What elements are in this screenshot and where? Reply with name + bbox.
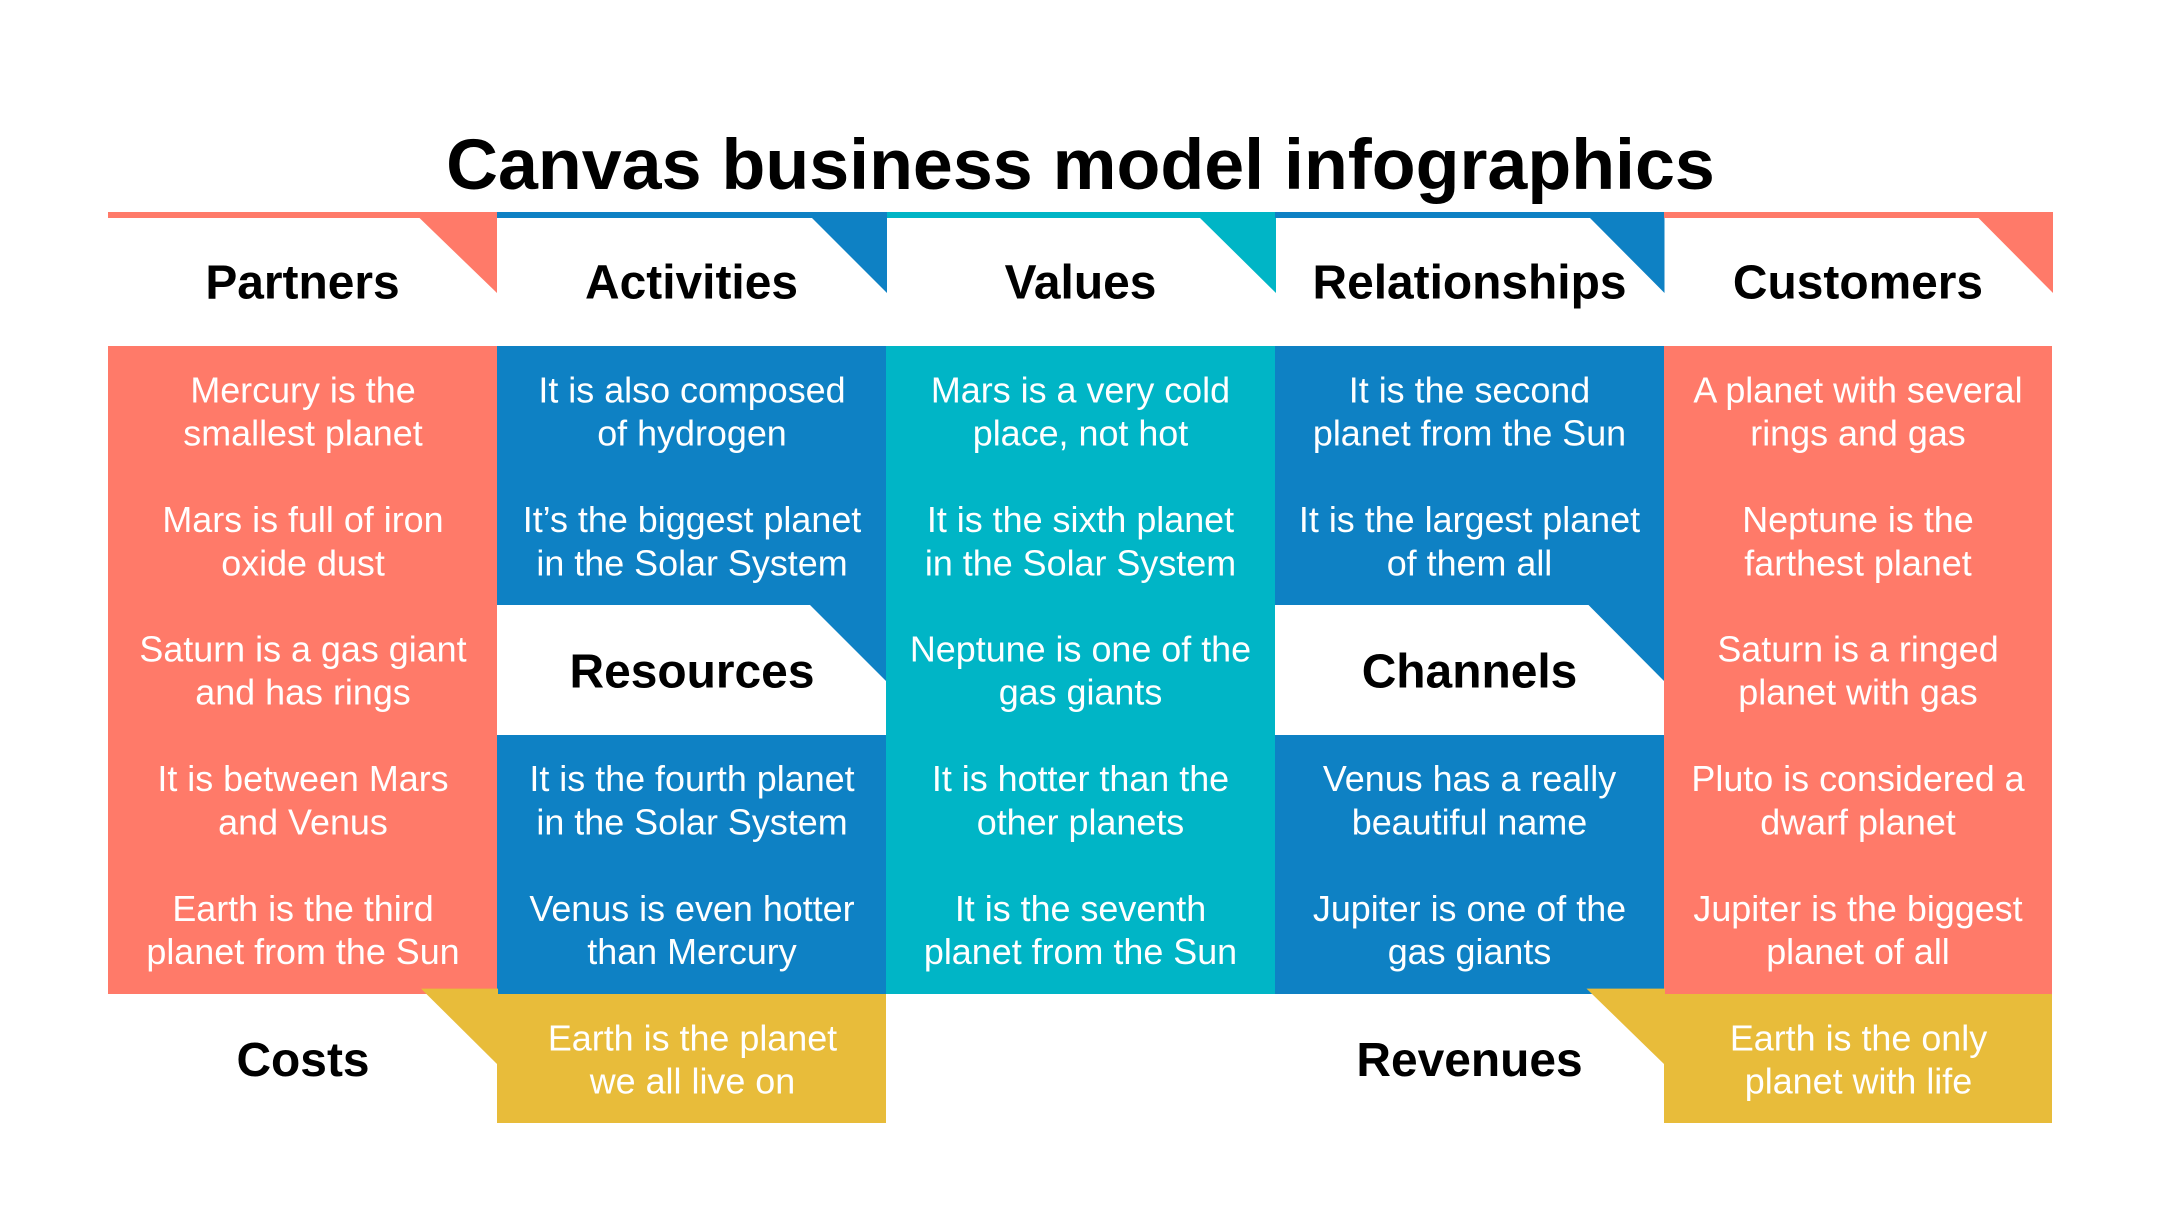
heading tab: partners: Partners bbox=[205, 256, 400, 310]
column body: activities: of hydrogen bbox=[597, 414, 787, 454]
panel: relationships bbox=[1275, 212, 1664, 605]
heading tab: costs bbox=[236, 989, 498, 1087]
column body: relationships: It is the second bbox=[1349, 370, 1590, 410]
column body: customers: Pluto is considered a bbox=[1691, 759, 2025, 799]
column body: customers: Jupiter is the biggest bbox=[1693, 889, 2023, 929]
column body: resources: in the Solar System bbox=[536, 802, 848, 842]
column body: channels: beautiful name bbox=[1352, 802, 1587, 842]
heading tab: customers: Customers bbox=[1733, 256, 1983, 310]
cost text block: Earth is the planet bbox=[548, 1018, 837, 1058]
heading tab: values bbox=[887, 212, 1276, 310]
column body: activities bbox=[497, 346, 886, 605]
column body: partners bbox=[108, 346, 497, 994]
column body: customers: planet of all bbox=[1766, 932, 1950, 972]
revenue text block: planet with life bbox=[1745, 1062, 1972, 1102]
heading tab: partners bbox=[108, 212, 497, 310]
column body: channels: Jupiter is one of the bbox=[1313, 889, 1626, 929]
heading tab: channels bbox=[1362, 605, 1664, 698]
column body: values: It is the seventh bbox=[955, 889, 1206, 929]
panel: resources bbox=[497, 605, 886, 994]
column body: values: planet from the Sun bbox=[924, 932, 1237, 972]
column body: partners: and has rings bbox=[195, 672, 411, 712]
column body: partners: oxide dust bbox=[221, 544, 385, 584]
column body: relationships: planet from the Sun bbox=[1313, 414, 1626, 454]
column body: activities: It is also composed bbox=[538, 370, 846, 410]
column body: partners: planet from the Sun bbox=[146, 932, 460, 972]
column body: values: gas giants bbox=[999, 672, 1162, 712]
column body: values: It is hotter than the bbox=[932, 759, 1229, 799]
column body: customers: farthest planet bbox=[1744, 544, 1972, 584]
revenue text block: Earth is the only bbox=[1730, 1018, 1987, 1058]
column body: values: place, not hot bbox=[973, 414, 1188, 454]
column body: partners: Earth is the third bbox=[172, 889, 434, 929]
title: Canvas business model infographics bbox=[446, 125, 1715, 205]
column body: resources bbox=[497, 735, 886, 994]
heading tab: values: Values bbox=[1005, 256, 1156, 310]
column body: customers: Saturn is a ringed bbox=[1717, 630, 1999, 670]
column body: customers: Neptune is the bbox=[1742, 500, 1974, 540]
column body: values: Neptune is one of the bbox=[910, 630, 1251, 670]
column body: relationships: It is the largest planet bbox=[1299, 500, 1640, 540]
column body: channels bbox=[1275, 735, 1664, 994]
panel: partners bbox=[108, 212, 497, 994]
heading tab: revenues bbox=[1356, 989, 1665, 1087]
panel: costs bbox=[236, 989, 886, 1123]
revenue text block bbox=[1664, 994, 2052, 1123]
column body: values bbox=[886, 346, 1275, 994]
column body: customers: planet with gas bbox=[1738, 672, 1978, 712]
heading tab: costs: Costs bbox=[236, 1034, 370, 1087]
column body: relationships: of them all bbox=[1387, 544, 1552, 584]
column body: channels: gas giants bbox=[1388, 932, 1551, 972]
heading tab: revenues: Revenues bbox=[1356, 1034, 1583, 1087]
heading tab: channels: Channels bbox=[1362, 646, 1577, 698]
column body: partners: and Venus bbox=[218, 802, 388, 842]
cost text block: we all live on bbox=[589, 1062, 795, 1102]
heading tab: relationships: Relationships bbox=[1312, 256, 1627, 310]
column body: values: It is the sixth planet bbox=[927, 500, 1234, 540]
column body: channels: Venus has a really bbox=[1323, 759, 1616, 799]
column body: values: in the Solar System bbox=[925, 544, 1236, 584]
panel: customers bbox=[1664, 212, 2053, 994]
panel: revenues bbox=[1356, 989, 2052, 1123]
column body: values: other planets bbox=[977, 802, 1184, 842]
column body: partners: Mars is full of iron bbox=[162, 500, 444, 540]
column body: partners: smallest planet bbox=[183, 414, 423, 454]
heading tab: customers bbox=[1664, 212, 2053, 310]
column body: values: Mars is a very cold bbox=[931, 370, 1230, 410]
column body: resources: It is the fourth planet bbox=[529, 759, 855, 799]
column body: activities: It’s the biggest planet bbox=[523, 500, 861, 540]
heading tab: resources: Resources bbox=[570, 646, 814, 698]
column body: activities: in the Solar System bbox=[536, 544, 848, 584]
column body: customers: dwarf planet bbox=[1760, 802, 1956, 842]
column body: partners: It is between Mars bbox=[157, 759, 449, 799]
column body: resources: Venus is even hotter bbox=[529, 889, 855, 929]
cost text block bbox=[497, 994, 886, 1123]
heading tab: resources bbox=[570, 605, 886, 698]
column body: customers bbox=[1664, 346, 2052, 994]
column body: partners: Saturn is a gas giant bbox=[139, 630, 467, 670]
column body: resources: than Mercury bbox=[587, 932, 797, 972]
heading tab: relationships bbox=[1275, 212, 1664, 310]
heading tab: activities bbox=[497, 212, 887, 310]
column body: partners: Mercury is the bbox=[190, 370, 416, 410]
heading tab: activities: Activities bbox=[585, 256, 798, 310]
column body: relationships bbox=[1275, 346, 1664, 605]
column body: customers: A planet with several bbox=[1693, 370, 2023, 410]
panel: values bbox=[886, 212, 1276, 994]
panel: channels bbox=[1275, 605, 1664, 994]
column body: customers: rings and gas bbox=[1750, 414, 1966, 454]
panel: activities bbox=[497, 212, 887, 605]
